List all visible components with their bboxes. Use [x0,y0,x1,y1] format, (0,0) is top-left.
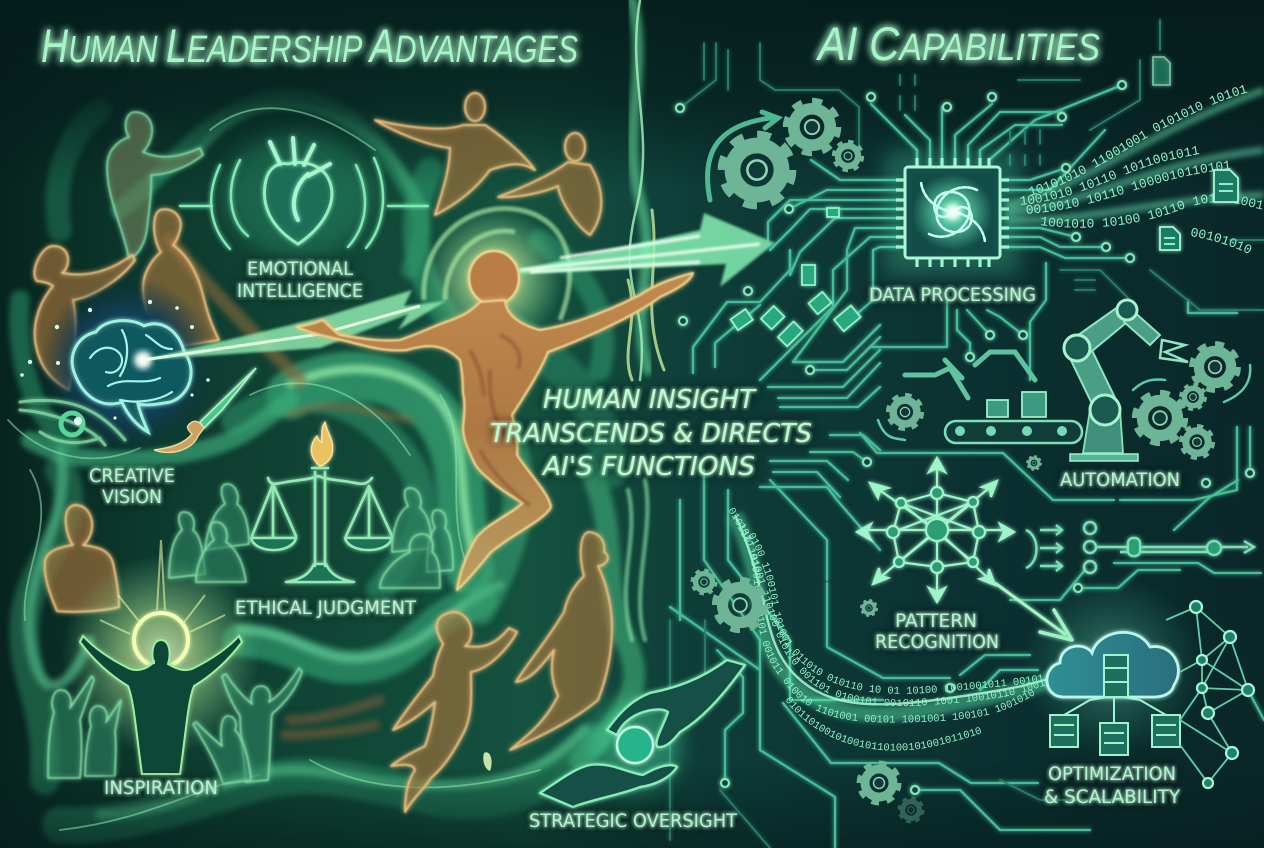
figures: lower running pair [391,532,612,812]
data streams with binary: 1001010 10110 1011001011 [1020,146,1200,205]
label: Inspiration: INSPIRATION [104,777,218,799]
data streams with binary: 0010010 10110 1000010110101 [1026,160,1231,214]
icon: gears top left of AI panel [708,102,862,204]
figures: top right dancers [375,93,601,235]
label: Pattern Recognition: PATTERN [895,610,977,632]
label: Pattern Recognition [875,610,999,653]
icon: AI chip with spiral [885,150,1020,275]
main message [490,385,812,482]
label: Emotional Intelligence [237,258,363,302]
icon: pattern recognition network [857,458,1014,602]
icon: anatomical heart with sound waves [180,133,428,257]
figures: crowd around the scales [169,484,453,588]
arrow: pattern to cloud [995,583,1072,640]
label: Automation: AUTOMATION [1060,469,1180,491]
circuit traces: right side [670,20,1264,848]
label: Data Processing: DATA PROCESSING [869,284,1036,306]
arrow: leader to AI chip [518,213,775,287]
heading: AI Capabilities: AI CAPABILITIES [815,17,1100,70]
data streams with binary [1003,84,1264,253]
central glowing divider [626,0,664,640]
main message: TRANSCENDS & DIRECTS [490,419,812,449]
fine brush strokes: left side [8,108,540,830]
label: Emotional Intelligence: EMOTIONAL [247,258,353,280]
label: Pattern Recognition: RECOGNITION [875,631,999,653]
icon: paintbrush [154,368,256,452]
label: Strategic Oversight: STRATEGIC OVERSIGHT [529,810,737,832]
icon: scales with flame [251,422,392,582]
painted swirl background: left side [19,98,634,826]
figure: thinking person [45,505,119,612]
flowing binary data stream to cloud: 0100 1100101 101001 011010 010110 10 01 10100 1001001011 00101 [749,533,1044,694]
label: Ethical Judgment: ETHICAL JUDGMENT [235,597,416,619]
label: Creative Vision [89,465,175,508]
icon: inspiration figure with halo [48,540,302,784]
icon: hand holding glowing orb [540,660,745,807]
arrow: brain to leader [134,290,446,369]
figure: central glowing leader [297,208,693,590]
figures: top-left team [34,112,219,390]
label: Optimization and Scalability: & SCALABILITY [1044,786,1180,808]
icon: glowing brain on nebula [20,277,216,453]
label: Creative Vision: VISION [102,486,162,508]
label: Emotional Intelligence: INTELLIGENCE [237,280,363,302]
gears: lower AI panel [692,570,923,822]
chips on the traces [731,208,861,346]
flowing binary data stream to cloud: 0101101001010010110100101001011010 [786,697,981,751]
flowing binary data stream to cloud: 010110 101001 110100 010110 001101 0100101 0010110 1001 10010110 100100 [729,508,1046,706]
main message: AI'S FUNCTIONS [541,452,755,482]
main message: HUMAN INSIGHT [543,385,757,415]
data streams with binary: 10101010 11001001 0101010 10101 [1028,84,1248,196]
label: Optimization and Scalability: OPTIMIZATION [1048,763,1176,785]
icon: eye in swirl [20,400,125,445]
icon: small logic circuit [1026,522,1254,573]
label: Creative Vision: CREATIVE [89,465,175,487]
icon: documents [1153,57,1238,250]
icon: cloud with servers and network [1022,575,1254,788]
label: Optimization and Scalability [1044,763,1180,808]
heading: Human Leadership Advantages: HUMAN LEADERSHIP ADVANTAGES [41,19,578,72]
flowing binary data stream to cloud: 1011 010010 110101 001011 010010 1101001 00101 1001001 100101 1001010 [738,523,1034,722]
icon: robot arm with conveyor and gears [878,300,1250,470]
data streams with binary: 00101010 [1191,228,1252,253]
